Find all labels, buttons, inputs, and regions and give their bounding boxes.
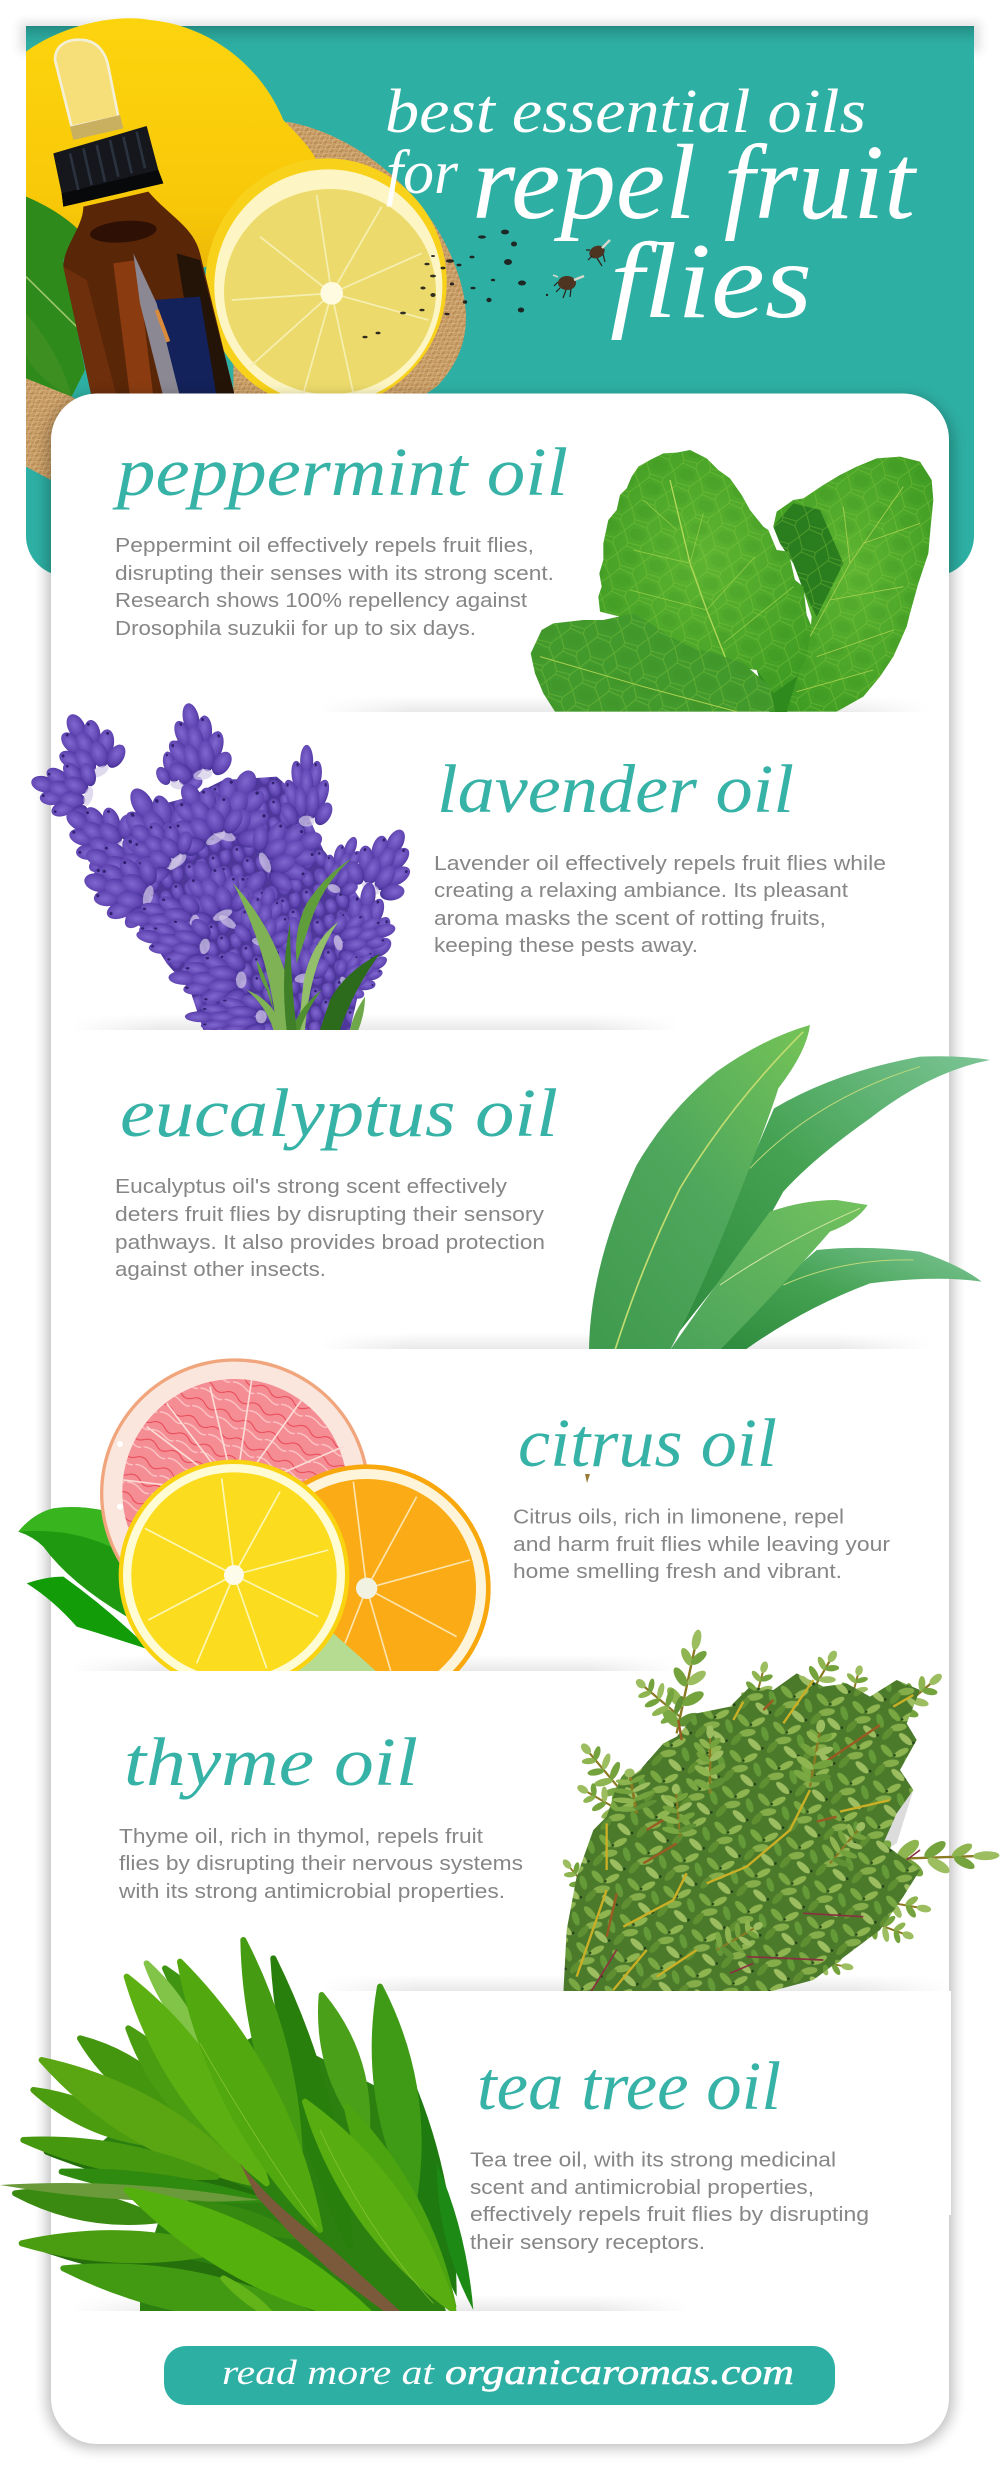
panel: tea tree oil	[0, 1940, 951, 2323]
image: thyme sprigs	[552, 1625, 1000, 1993]
text: citrus description: and harm fruit flies while leaving your	[513, 1533, 890, 1556]
text: lavender description: Lavender oil effectively repels fruit flies while	[434, 852, 886, 875]
panel: peppermint oil	[111, 434, 933, 713]
text: eucalyptus description: pathways. It also provides broad protection	[115, 1231, 545, 1254]
text: tea tree description: effectively repels fruit flies by disrupting	[470, 2203, 869, 2226]
fruit flies swarm	[362, 230, 548, 338]
text: thyme description: Thyme oil, rich in thymol, repels fruit	[119, 1825, 483, 1848]
text: eucalyptus description: Eucalyptus oil's strong scent effectively	[115, 1175, 508, 1198]
panel: main card	[47, 394, 953, 2448]
text: peppermint description: Drosophila suzukii for up to six days.	[115, 617, 476, 640]
text: citrus description: Citrus oils, rich in limonene, repel	[513, 1506, 844, 1528]
text: tea tree description: their sensory receptors.	[470, 2231, 705, 2254]
heading: eucalyptus oil: eucalyptus oil	[120, 1075, 558, 1151]
panel: lavender oil	[23, 696, 886, 1040]
icon: large fruit fly	[553, 275, 584, 298]
button: read more	[164, 2346, 835, 2405]
text: peppermint description	[115, 534, 554, 640]
heading: lavender oil: lavender oil	[437, 751, 794, 827]
text: lavender description	[434, 852, 886, 957]
panel: header	[20, 18, 980, 576]
text: tea tree description	[470, 2148, 869, 2254]
icon: large fruit fly	[586, 240, 610, 266]
text: thyme description	[118, 1825, 523, 1903]
text: thyme description: with its strong antimicrobial properties.	[118, 1880, 505, 1903]
image: citrus slices	[18, 1358, 491, 1671]
title	[385, 78, 917, 341]
text: tea tree description: scent and antimicrobial properties,	[470, 2176, 814, 2199]
text: lavender description: keeping these pests away.	[434, 934, 698, 957]
title: for	[386, 139, 459, 207]
text: lavender description: creating a relaxing ambiance. Its pleasant	[434, 879, 848, 902]
text: citrus description	[513, 1506, 890, 1583]
panel: eucalyptus oil	[115, 1025, 990, 1350]
image: mint leaves	[531, 450, 933, 713]
text: tea tree description: Tea tree oil, with its strong medicinal	[470, 2148, 836, 2172]
text: lavender description: aroma masks the scent of rotting fruits,	[434, 907, 826, 930]
heading: peppermint oil: peppermint oil	[111, 434, 568, 510]
panel: thyme oil	[118, 1625, 1000, 1993]
title: repel fruit	[472, 124, 917, 242]
text: website: organicaromas.com	[445, 2352, 794, 2392]
text: citrus description: home smelling fresh and vibrant.	[513, 1560, 842, 1583]
text: peppermint description: Peppermint oil effectively repels fruit flies,	[115, 534, 534, 557]
text: peppermint description: disrupting their senses with its strong scent.	[115, 562, 554, 585]
text: thyme description: flies by disrupting their nervous systems	[119, 1852, 523, 1875]
text: read more at: read more at	[222, 2353, 436, 2392]
panel: citrus oil	[18, 1358, 890, 1712]
text: eucalyptus description	[115, 1175, 545, 1281]
title: flies	[610, 222, 812, 341]
title: best essential oils	[385, 78, 866, 146]
image: lavender bouquet	[31, 703, 410, 1030]
heading: thyme oil: thyme oil	[124, 1724, 418, 1800]
image: eucalyptus leaves	[589, 1025, 990, 1350]
heading: citrus oil: citrus oil	[518, 1405, 777, 1481]
text: eucalyptus description: deters fruit flies by disrupting their sensory	[115, 1203, 545, 1226]
image: lemons, basket and dropper bottle	[26, 18, 466, 480]
text: eucalyptus description: against other insects.	[115, 1258, 326, 1281]
text: peppermint description: Research shows 100% repellency against	[115, 589, 527, 612]
image: tea tree branch	[0, 1940, 473, 2323]
heading: tea tree oil: tea tree oil	[477, 2048, 781, 2124]
